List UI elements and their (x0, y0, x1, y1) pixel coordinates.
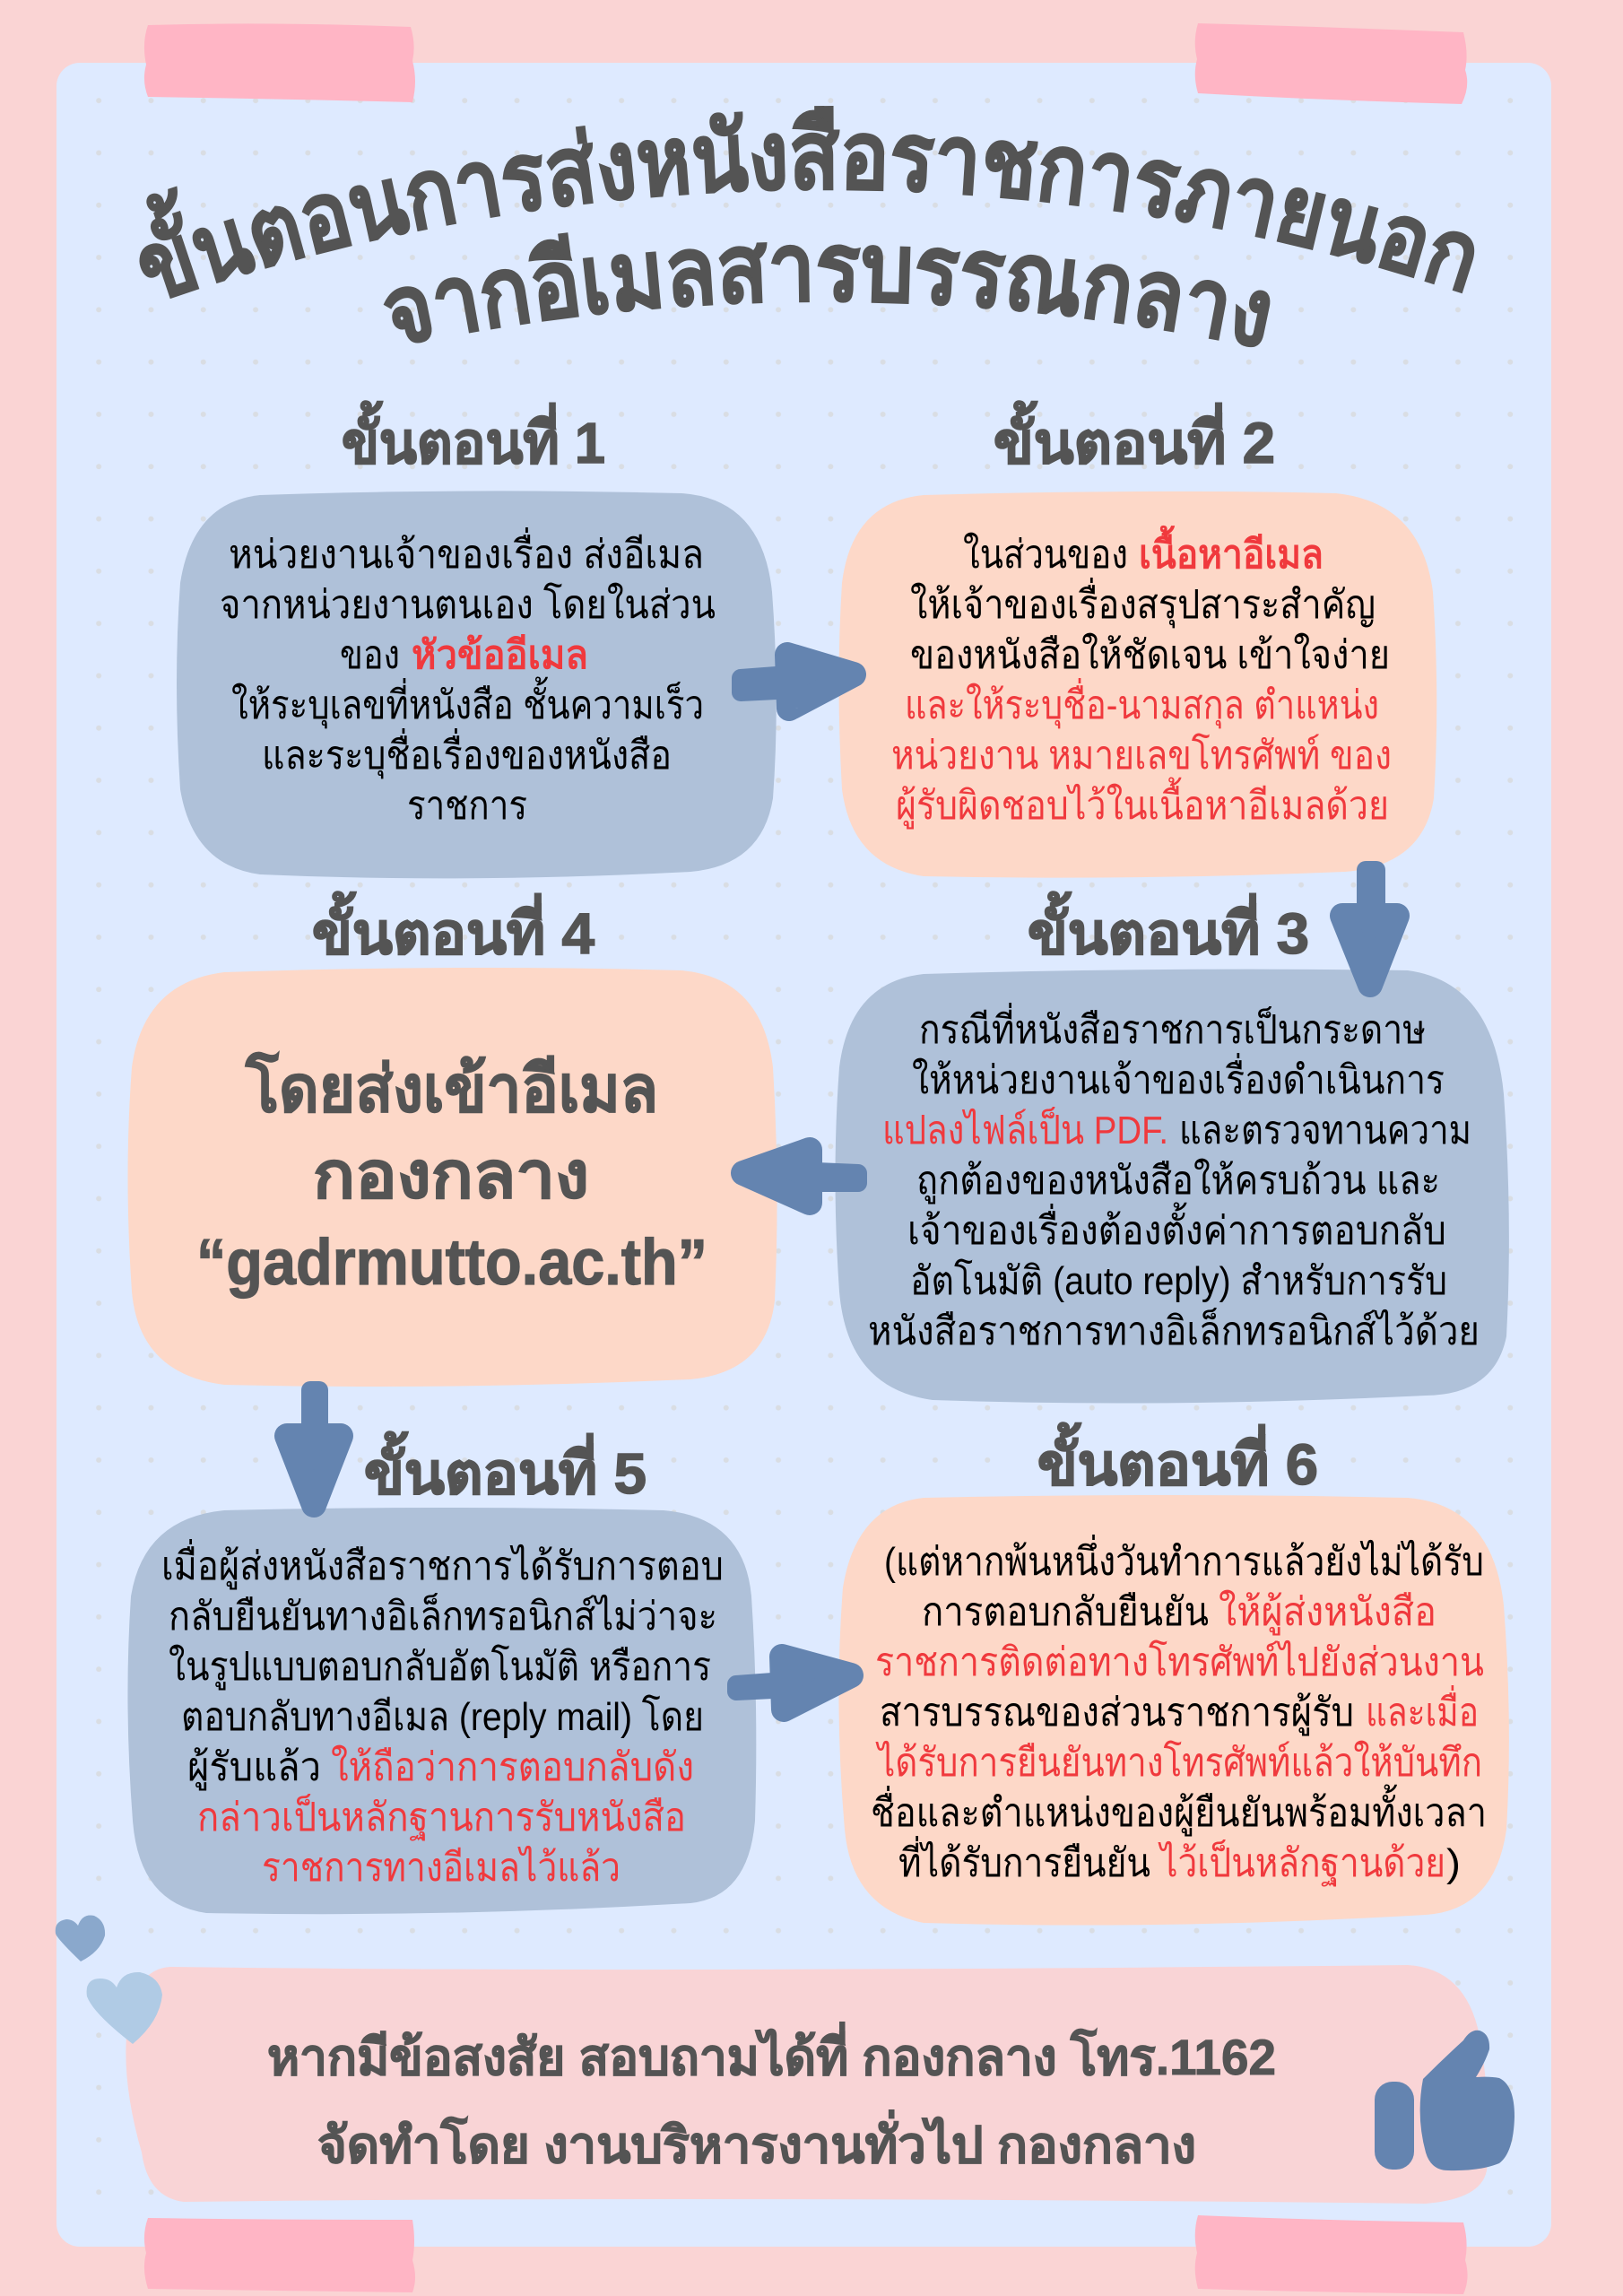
panel: step 2: หน่วยงาน หมายเลขโทรศัพท์ ของ (891, 733, 1392, 778)
panel: footer: จัดทำโดย งานบริหารงานทั่วไป กองกลาง (317, 2109, 1196, 2173)
panel: step 5: กลับยืนยันทางอิเล็กทรอนิกส์ไม่ว่าจะ (169, 1593, 717, 1639)
arrow: step 4 to step 5 (287, 1390, 341, 1505)
panel: step 6: สารบรรณของส่วนราชการผู้รับ (880, 1691, 1354, 1736)
panel: step 4: กองกลาง (313, 1140, 589, 1212)
icon: large heart (87, 1972, 162, 2044)
heading: step 1: ขั้นตอนที่ 1 (342, 401, 605, 475)
panel: step 2: ของหนังสือให้ชัดเจน เข้าใจง่าย (910, 632, 1390, 677)
title: ขั้นตอนการส่งหนังสือราชการภายนอก (140, 106, 1474, 300)
panel: step 4: โดยส่งเข้าอีเมล (245, 1050, 658, 1126)
panel: step 6: ไว้เป็นหลักฐานด้วย (1158, 1839, 1445, 1886)
panel: step 2: ให้เจ้าของเรื่องสรุปสาระสำคัญ (910, 577, 1376, 629)
panel: step 5: เมื่อผู้ส่งหนังสือราชการได้รับการตอบ (161, 1538, 724, 1590)
arrow: step 1 to step 2 (741, 655, 854, 709)
panel: step 3: กรณีที่หนังสือราชการเป็นกระดาษ (919, 1002, 1426, 1052)
panel: step 3: แปลงไฟล์เป็น PDF. (882, 1107, 1168, 1152)
panel: step 6: ราชการติดต่อทางโทรศัพท์ไปยังส่วนงาน (875, 1639, 1484, 1684)
panel: step 1: และระบุชื่อเรื่องของหนังสือ (262, 727, 672, 779)
panel: step 6: การตอบกลับยืนยัน (922, 1590, 1209, 1634)
panel: step 4 (127, 968, 777, 1387)
heading: step 6: ขั้นตอนที่ 6 (1037, 1422, 1318, 1497)
panel: step 6: และเมื่อ (1366, 1684, 1479, 1735)
panel: footer: หากมีข้อสงสัย สอบถามได้ที่ กองกลาง โทร.1162 (267, 2022, 1276, 2085)
panel: step 3: อัตโนมัติ (auto reply) สำหรับการรับ (910, 1258, 1447, 1303)
tape: bottom left (144, 2218, 415, 2292)
panel: step 6: ชื่อและตำแหน่งของผู้ยืนยันพร้อมทั้งเวลา (871, 1784, 1487, 1837)
panel: step 6 (838, 1495, 1509, 1926)
panel: step 1: ให้ระบุเลขที่หนังสือ ชั้นความเร็ว (231, 676, 704, 729)
heading: step 3: ขั้นตอนที่ 3 (1028, 891, 1309, 966)
panel: step 2 (839, 491, 1436, 878)
panel: step 5: กล่าวเป็นหลักฐานการรับหนังสือ (197, 1794, 686, 1840)
panel: step 1: หน่วยงานเจ้าของเรื่อง ส่งอีเมล (229, 526, 704, 577)
panel: step 1: ของ (340, 633, 400, 677)
panel: step 5: ให้ถือว่าการตอบกลับดัง (331, 1744, 694, 1789)
panel: step 5: ตอบกลับทางอีเมล (reply mail) โดย (181, 1694, 704, 1739)
panel: step 1: ราชการ (407, 784, 527, 828)
panel: step 3 (836, 970, 1509, 1404)
panel: step 6: ให้ผู้ส่งหนังสือ (1219, 1589, 1436, 1636)
icon: thumbs up (1375, 2031, 1515, 2170)
tape: bottom right (1195, 2215, 1468, 2294)
panel: step 6: (แต่หากพ้นหนึ่งวันทำการแล้วยังไม่ได้รับ (884, 1534, 1484, 1584)
panel: footer (126, 1965, 1488, 2204)
panel: step 5: ผู้รับแล้ว (187, 1745, 321, 1791)
panel: step 1: จากหน่วยงานตนเอง โดยในส่วน (220, 582, 716, 627)
panel: step 6: ) (1446, 1841, 1461, 1885)
panel: step 3: เจ้าของเรื่องต้องตั้งค่าการตอบกลับ (907, 1202, 1446, 1253)
panel: step 5: ราชการทางอีเมลไว้แล้ว (262, 1845, 621, 1890)
heading: step 4: ขั้นตอนที่ 4 (312, 891, 595, 966)
heading: step 2: ขั้นตอนที่ 2 (994, 401, 1275, 475)
panel: step 1 (177, 491, 777, 878)
panel: step 2: เนื้อหาอีเมล (1139, 525, 1324, 577)
panel: step 2: ในส่วนของ (963, 532, 1128, 577)
panel: step 3: ถูกต้องของหนังสือให้ครบถ้วน และ (916, 1158, 1440, 1205)
tape: top left (144, 23, 415, 102)
tape: top right (1195, 23, 1467, 104)
heading: step 5: ขั้นตอนที่ 5 (364, 1431, 647, 1506)
panel: step 3: ให้หน่วยงานเจ้าของเรื่องดำเนินการ (912, 1052, 1445, 1102)
panel: step 6: ที่ได้รับการยืนยัน (898, 1835, 1150, 1885)
title: จากอีเมลสารบรรณกลาง (384, 232, 1270, 348)
panel: step 4: “gadrmutto.ac.th” (196, 1227, 707, 1299)
panel: step 1: หัวข้ออีเมล (412, 633, 588, 677)
panel: step 2: ผู้รับผิดชอบไว้ในเนื้อหาอีเมลด้วย (896, 777, 1389, 830)
panel: step 5: ในรูปแบบตอบกลับอัตโนมัติ หรือการ (169, 1644, 711, 1691)
arrow: step 2 to step 3 (1342, 870, 1397, 985)
panel: step 6: ได้รับการยืนยันทางโทรศัพท์แล้วให้บันทึก (875, 1740, 1482, 1785)
arrow: step 3 to step 4 (743, 1150, 858, 1203)
icon: small heart (56, 1915, 105, 1961)
panel: step 3: และตรวจทานความ (1179, 1109, 1471, 1152)
panel: step 2: และให้ระบุชื่อ-นามสกุล ตำแหน่ง (905, 677, 1379, 729)
arrow: step 5 to step 6 (736, 1657, 851, 1709)
panel: step 5 (127, 1508, 756, 1914)
panel: step 3: หนังสือราชการทางอิเล็กทรอนิกส์ไว้ด้วย (868, 1308, 1480, 1353)
